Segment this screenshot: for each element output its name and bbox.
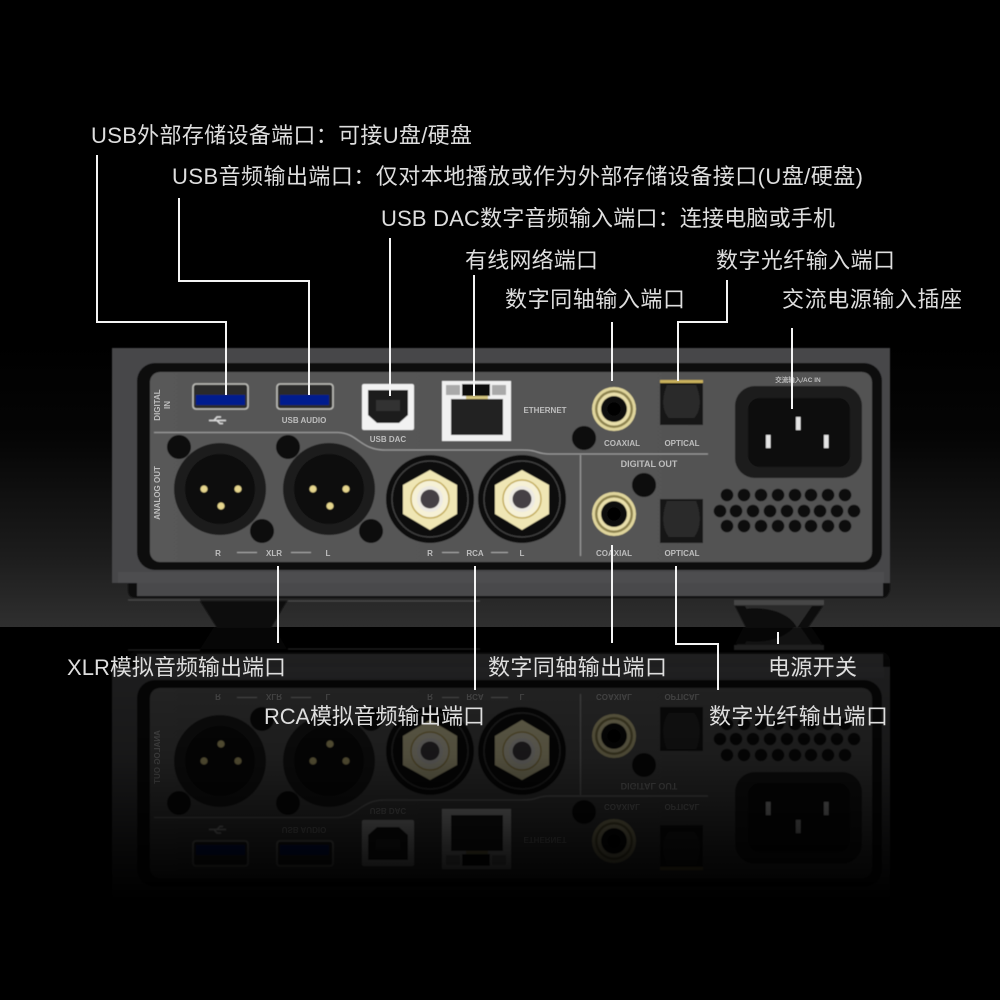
reflected labels: R [215,692,221,701]
coaxial output [592,492,636,536]
label: coaxial out: 数字同轴输出端口 [488,655,667,680]
callout labels [67,123,962,729]
screw holes [167,426,656,543]
device panel labels: OPTICAL [664,439,700,448]
reflected labels: OPTICAL [664,802,700,811]
leader: coaxial in [611,322,613,381]
reflected labels: DIGITAL OUT [621,781,678,791]
leader: XLR out [277,566,279,643]
device panel labels: COAXIAL [596,549,632,558]
label: USB audio: USB音频输出端口：仅对本地播放或作为外部存储设备接口(U盘/硬盘) [172,164,863,189]
leader: Ethernet [473,275,475,396]
reflected labels: OPTICAL [664,692,700,701]
RCA connector L [478,455,566,543]
reflected labels [153,692,700,844]
USB DAC port [362,384,414,430]
device panel labels: DIGITAL [153,389,162,421]
reflected labels: USB DAC [370,806,406,815]
leader: optical out [676,566,718,690]
leader: RCA out [474,566,476,690]
leader: coaxial out [611,545,613,643]
device panel labels [153,375,821,558]
label: power switch: 电源开关 [768,655,857,680]
device panel labels: 交流输入/AC IN [775,375,821,384]
device panel labels: COAXIAL [604,439,640,448]
device panel labels: R [427,549,433,558]
label: USB DAC: USB DAC数字音频输入端口：连接电脑或手机 [381,206,835,231]
optical output [660,499,703,543]
reflected labels: COAXIAL [604,802,640,811]
device rear panel [112,348,890,628]
device panel labels: OPTICAL [664,549,700,558]
left foot [200,601,287,628]
chassis [112,348,890,583]
label: AC in: 交流电源输入插座 [782,287,962,312]
USB port 1 [193,384,248,409]
device panel labels: R [215,549,221,558]
RCA connector R [386,455,474,543]
recessed panel [137,363,882,570]
label: XLR out: XLR模拟音频输出端口 [67,655,286,680]
base lip [128,580,890,598]
leader: USB DAC [389,238,391,396]
panel dividers [154,432,708,556]
reflected labels: USB AUDIO [282,825,326,834]
reflected labels: COAXIAL [596,692,632,701]
right foot [734,600,824,628]
device panel labels: ETHERNET [523,406,567,415]
leader: AC in [791,328,793,409]
reflected labels: RCA [466,692,484,701]
leader: optical in [678,280,727,381]
base lip face [137,583,883,596]
leader: USB audio [179,198,309,395]
leader lines [97,155,792,690]
label: Ethernet: 有线网络端口 [465,248,598,273]
chassis lower band [118,572,884,583]
floor reflection [112,627,890,870]
device panel labels: IN [163,401,172,409]
label: optical out: 数字光纤输出端口 [709,704,888,729]
USB port 2 [277,384,333,409]
reflected labels: R [427,692,433,701]
Ethernet port [442,381,511,441]
device panel labels: L [326,549,331,558]
device panel labels: DIGITAL OUT [621,459,678,469]
reflected labels: L [520,692,525,701]
device panel labels: XLR [266,549,282,558]
shelf edge line [128,600,480,601]
reflected labels: L [326,692,331,701]
reflected labels: ANALOG OUT [153,730,162,784]
reflected labels: ETHERNET [523,835,567,844]
label: USB storage: USB外部存储设备端口：可接U盘/硬盘 [91,123,472,148]
coaxial input [592,387,636,431]
device panel labels: RCA [466,549,484,558]
vent holes [714,489,860,532]
label: optical in: 数字光纤输入端口 [716,248,895,273]
XLR and RCA label rules [237,552,508,554]
optical input [660,380,703,425]
leader: USB storage [97,155,226,395]
XLR connector R [174,443,266,535]
USB symbol [209,417,226,424]
power inlet [735,386,862,478]
device panel labels: USB DAC [370,435,406,444]
leader: power switch [777,632,779,644]
device panel labels: ANALOG OUT [153,466,162,520]
XLR connector L [283,443,375,535]
device panel labels: USB AUDIO [282,416,326,425]
label: coaxial in: 数字同轴输入端口 [505,287,685,312]
label: RCA out: RCA模拟音频输出端口 [264,704,485,729]
device panel labels: L [520,549,525,558]
reflected labels: XLR [266,692,282,701]
inner panel [150,372,872,562]
